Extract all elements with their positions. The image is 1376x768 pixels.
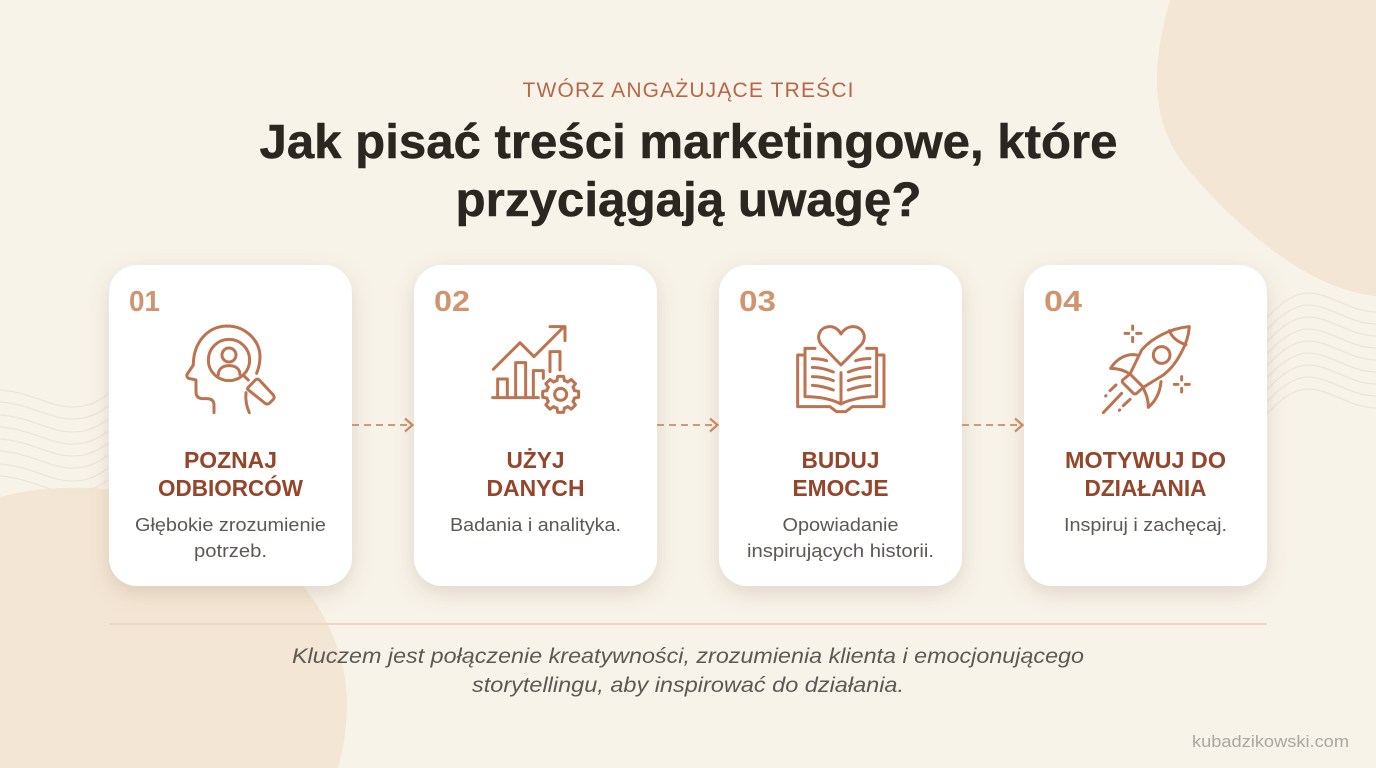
step description: Inspiruj i zachęcaj. [1064, 514, 1227, 535]
step number 03: 03 [739, 286, 776, 318]
arrow 3 [962, 418, 1022, 432]
step heading: BUDUJ [802, 447, 880, 473]
icon: head with magnifier [187, 326, 274, 413]
step heading: DANYCH [486, 475, 584, 501]
step heading [486, 447, 584, 501]
step description: Badania i analityka. [450, 514, 621, 535]
footer url: kubadzikowski.com [1192, 733, 1349, 751]
arrow 1 [352, 418, 412, 432]
icon: growth chart with gear [493, 327, 579, 412]
icon: rocket [1103, 326, 1189, 413]
step number 01: 01 [129, 286, 160, 318]
closing statement: Kluczem jest połączenie kreatywności, zrozumienia klienta i emocjonującego [292, 644, 1084, 668]
step description [135, 514, 326, 561]
panel: step 02 [414, 265, 657, 586]
step heading: MOTYWUJ DO [1065, 447, 1226, 473]
step description: inspirujących historii. [747, 540, 934, 561]
panel: step 04 [1024, 265, 1267, 586]
title [260, 115, 1118, 227]
step heading: DZIAŁANIA [1084, 475, 1207, 501]
step heading: UŻYJ [506, 447, 564, 473]
step description: Opowiadanie [782, 514, 898, 535]
step heading: POZNAJ [184, 447, 277, 473]
step heading [1065, 447, 1226, 501]
icon: open book with heart [798, 327, 884, 412]
step heading: ODBIORCÓW [158, 474, 304, 501]
step heading: EMOCJE [792, 475, 888, 501]
step description: potrzeb. [194, 540, 267, 561]
step number 02: 02 [434, 286, 470, 318]
panel: step 01 [109, 265, 352, 586]
closing statement [292, 644, 1084, 697]
closing statement: storytellingu, aby inspirować do działania. [472, 673, 904, 697]
step heading [792, 447, 888, 501]
eyebrow: TWÓRZ ANGAŻUJĄCE TREŚCI [522, 78, 854, 102]
title: przyciągają uwagę? [456, 173, 922, 227]
step description: Głębokie zrozumienie [135, 514, 326, 535]
step description [747, 514, 934, 561]
step number 04: 04 [1044, 286, 1082, 318]
step heading [158, 447, 304, 501]
panel: step 03 [719, 265, 962, 586]
title: Jak pisać treści marketingowe, które [260, 115, 1118, 169]
arrow 2 [657, 418, 718, 432]
